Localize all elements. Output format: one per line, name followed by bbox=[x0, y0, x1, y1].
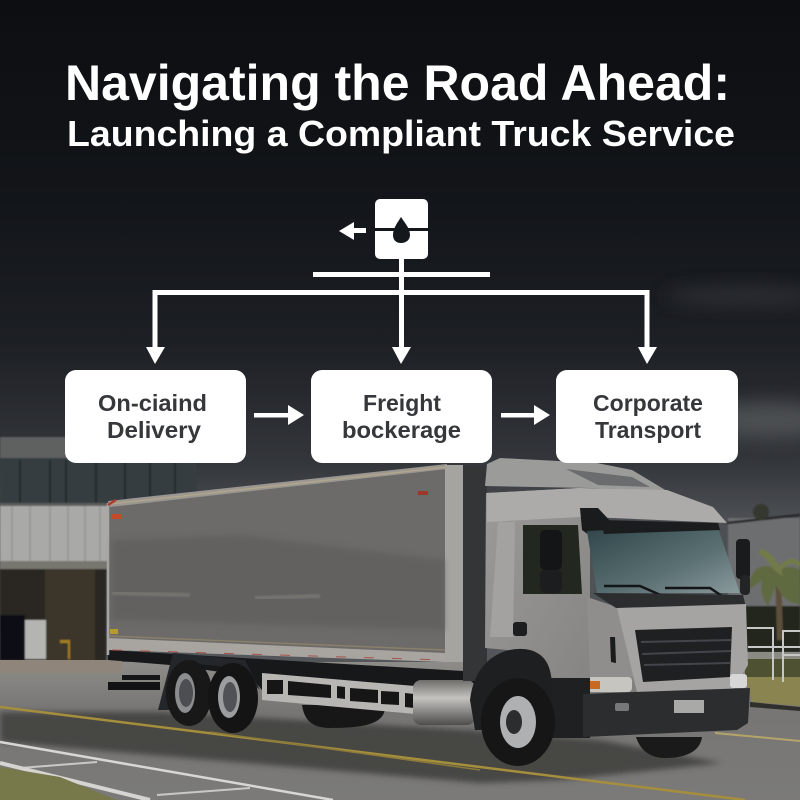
truck bbox=[108, 458, 750, 766]
side under-run guard bbox=[262, 673, 415, 714]
windshield bbox=[587, 525, 740, 593]
cab front corner bbox=[587, 597, 636, 680]
cab side bbox=[485, 488, 590, 678]
sun visor panel bbox=[566, 469, 650, 487]
panel: corporate transport: Transport bbox=[595, 417, 701, 443]
arrow: delivery to brokerage bbox=[254, 405, 304, 425]
panel: on-ciaind delivery: On-ciaind bbox=[98, 390, 207, 416]
fuel tank bbox=[413, 680, 475, 725]
grille bbox=[635, 627, 732, 682]
mirror, left bbox=[540, 508, 613, 593]
dark band below windshield bbox=[593, 593, 746, 608]
arrow: left from icon bbox=[339, 222, 366, 240]
reflection bbox=[112, 535, 445, 630]
panel: freight bockerage: Freight bbox=[363, 390, 441, 416]
panel: freight bockerage: bockerage bbox=[342, 417, 461, 443]
panel: on-ciaind delivery bbox=[65, 370, 246, 463]
panel: on-ciaind delivery: Delivery bbox=[107, 417, 201, 443]
warehouse building, left bbox=[0, 437, 197, 661]
title: Navigating the Road Ahead: bbox=[65, 55, 730, 111]
middle axle tires bbox=[302, 705, 385, 728]
grass and curb, bottom right bbox=[745, 676, 800, 706]
cab door window bbox=[523, 525, 582, 594]
headlights bbox=[588, 674, 747, 692]
grass, bottom left bbox=[0, 767, 117, 800]
title: Launching a Compliant Truck Service bbox=[67, 113, 735, 154]
cargo box bbox=[108, 464, 463, 662]
rear chassis and mudguards bbox=[108, 650, 480, 715]
far front tire bbox=[636, 737, 702, 758]
front wheel bbox=[470, 649, 555, 766]
shadow bbox=[0, 712, 722, 783]
wipers bbox=[604, 586, 728, 600]
gap between box and cab bbox=[463, 466, 487, 681]
cab roof fairing bbox=[485, 458, 667, 491]
connector arrows to service boxes bbox=[146, 259, 657, 364]
title bbox=[65, 55, 735, 154]
panel: corporate transport: Corporate bbox=[593, 390, 703, 416]
ground: road bbox=[0, 652, 800, 800]
arrow: brokerage to corporate bbox=[501, 405, 550, 425]
bin bbox=[25, 620, 46, 659]
white road markings bbox=[0, 742, 333, 800]
panel: corporate transport bbox=[556, 370, 738, 463]
rear wheels bbox=[166, 660, 258, 733]
lower cab and bumper bbox=[547, 678, 750, 738]
fence, right bbox=[747, 628, 800, 682]
front panel bbox=[617, 604, 748, 692]
cab upper visor bbox=[487, 488, 727, 523]
icon: top node with droplet bbox=[375, 199, 428, 259]
horizontal bar under icon bbox=[313, 272, 490, 277]
yellow lane line bbox=[0, 707, 745, 800]
right building and palm bbox=[727, 504, 800, 652]
mirror, right bbox=[736, 539, 750, 595]
panel: freight bockerage bbox=[311, 370, 492, 463]
